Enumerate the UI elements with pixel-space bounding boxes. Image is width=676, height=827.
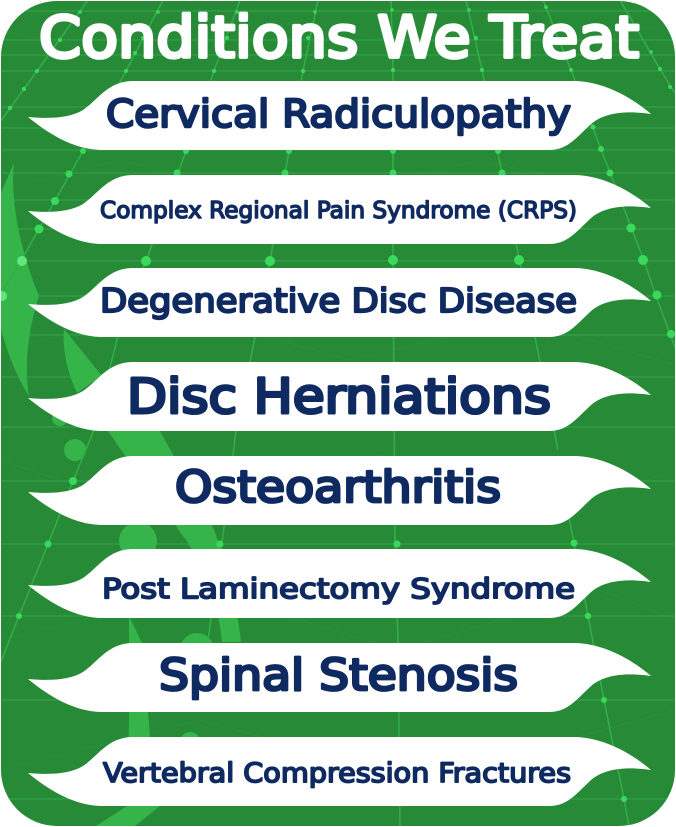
banner: Disc Herniations: Disc Herniations <box>127 369 551 425</box>
banner: Cervical Radiculopathy: Cervical Radiculopathy <box>106 92 571 136</box>
leaves and circles <box>0 163 241 826</box>
banner: Vertebral Compression Fractures: Vertebral Compression Fractures <box>103 758 571 789</box>
banner: Post Laminectomy Syndrome <box>28 549 651 618</box>
banner: Osteoarthritis <box>28 456 651 525</box>
banner: Osteoarthritis: Osteoarthritis <box>175 462 501 513</box>
banner: Degenerative Disc Disease <box>28 268 651 337</box>
banner: Degenerative Disc Disease: Degenerative Disc Disease <box>100 281 577 320</box>
banner: Cervical Radiculopathy <box>28 81 651 150</box>
banner: Complex Regional Pain Syndrome (CRPS): Complex Regional Pain Syndrome (CRPS) <box>100 196 577 224</box>
banner: Vertebral Compression Fractures <box>28 737 651 806</box>
banner: Spinal Stenosis: Spinal Stenosis <box>159 650 518 701</box>
banner: Spinal Stenosis <box>28 643 651 712</box>
title: Conditions We Treat <box>39 5 639 71</box>
banner: Disc Herniations <box>28 362 651 431</box>
banner: Complex Regional Pain Syndrome (CRPS) <box>28 175 651 244</box>
banner: Post Laminectomy Syndrome: Post Laminectomy Syndrome <box>102 572 575 605</box>
